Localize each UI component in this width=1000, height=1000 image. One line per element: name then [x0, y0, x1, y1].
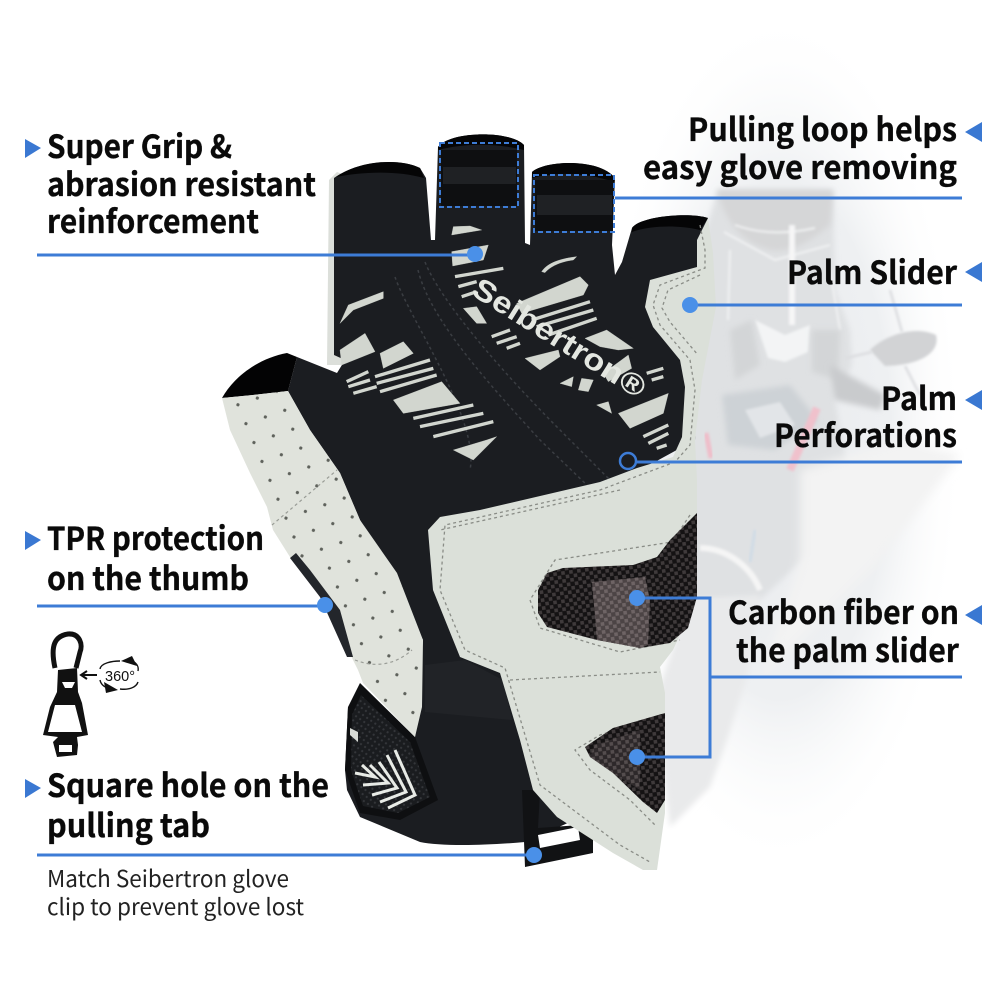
- cuff tab mark: [350, 728, 358, 742]
- glove palm: black leather: [288, 134, 708, 845]
- label: super grip: [47, 122, 316, 243]
- line: palm perforations: [637, 460, 962, 464]
- label: TPR protection: [47, 514, 264, 600]
- thumb tip: [222, 353, 297, 398]
- note: glove clip: clip to prevent glove lost: [47, 888, 304, 922]
- wrist cuff panel with chevrons: [345, 683, 438, 820]
- little finger pad stripes: [347, 360, 493, 437]
- light leather sliver beside little finger: [327, 172, 345, 365]
- chevron reflectors: [355, 750, 415, 808]
- palm grip stripes: [455, 268, 668, 448]
- label: carbon fibre: the palm slider: [736, 626, 959, 672]
- little finger pad blocks: [340, 292, 497, 460]
- label: palm perforations: Palm: [881, 374, 957, 420]
- rotation loops: [100, 660, 138, 689]
- label: palm perforations: Perforations: [774, 411, 957, 457]
- 360 label: 360°: [105, 668, 135, 685]
- fingertip shadows: [336, 134, 708, 232]
- label: square hole: [47, 761, 329, 847]
- label: square hole: pulling tab: [47, 801, 210, 847]
- cuff pull-tab with square hole: [522, 790, 593, 867]
- lower carbon fibre: [585, 713, 665, 813]
- note: glove clip: Match Seibertron glove: [47, 860, 289, 894]
- ring: perforation marker: [620, 453, 636, 469]
- callout dots: [317, 246, 698, 863]
- label: super grip: Super Grip &: [47, 122, 232, 168]
- line: palm slider: [690, 304, 962, 306]
- label: square hole: Square hole on the: [47, 761, 329, 807]
- bullet triangles: [25, 122, 982, 798]
- square hole: [538, 827, 580, 848]
- finger grip pads: [452, 226, 577, 273]
- mesh band at wrist: [425, 660, 512, 720]
- TPR strip on thumb: [290, 553, 353, 657]
- callout lines and markers: [37, 143, 962, 855]
- label: carbon fibre: [728, 588, 959, 672]
- line: super grip: [37, 254, 474, 256]
- pull loop dashed boxes: [440, 143, 614, 232]
- line: TPR: [37, 604, 325, 608]
- pull loop webbing: [443, 167, 612, 215]
- grip pattern on palm: [340, 226, 668, 460]
- label: pulling loop: easy glove removing: [643, 143, 957, 189]
- line: square hole: [37, 854, 534, 856]
- rotation arrow: [81, 671, 97, 679]
- label: palm slider: Palm Slider: [787, 248, 957, 294]
- palm slider leather panel: [428, 218, 716, 870]
- upper carbon fibre: [538, 513, 697, 648]
- icon: glove clip with 360 rotation: [43, 634, 138, 757]
- label: TPR protection: TPR protection: [47, 514, 264, 560]
- brand lettering on palm: Seibertron®: [466, 272, 652, 405]
- label: pulling loop: [643, 105, 957, 189]
- label: super grip: abrasion resistant: [47, 160, 316, 206]
- thumb seam: [272, 470, 412, 664]
- carbon highlight: [592, 577, 650, 648]
- palm seam shading: [395, 262, 610, 488]
- label: carbon fibre: Carbon fiber on: [728, 588, 959, 634]
- line: pulling loop: [615, 196, 962, 200]
- label: palm perforations: [774, 374, 957, 457]
- lower carbon highlight: [590, 730, 640, 790]
- palm grip blocks: [463, 277, 668, 428]
- note: glove clip: [47, 860, 304, 922]
- stitching: [440, 225, 705, 862]
- thumb leather with perforations: [220, 385, 430, 740]
- line: carbon fibre bracket: [637, 598, 962, 757]
- label: pulling loop: Pulling loop helps: [688, 105, 957, 151]
- label: TPR protection: on the thumb: [47, 554, 249, 600]
- pull loops on fingers: [441, 150, 613, 231]
- label: super grip: reinforcement: [47, 197, 259, 243]
- background: faded motorcycle rider: [595, 10, 965, 870]
